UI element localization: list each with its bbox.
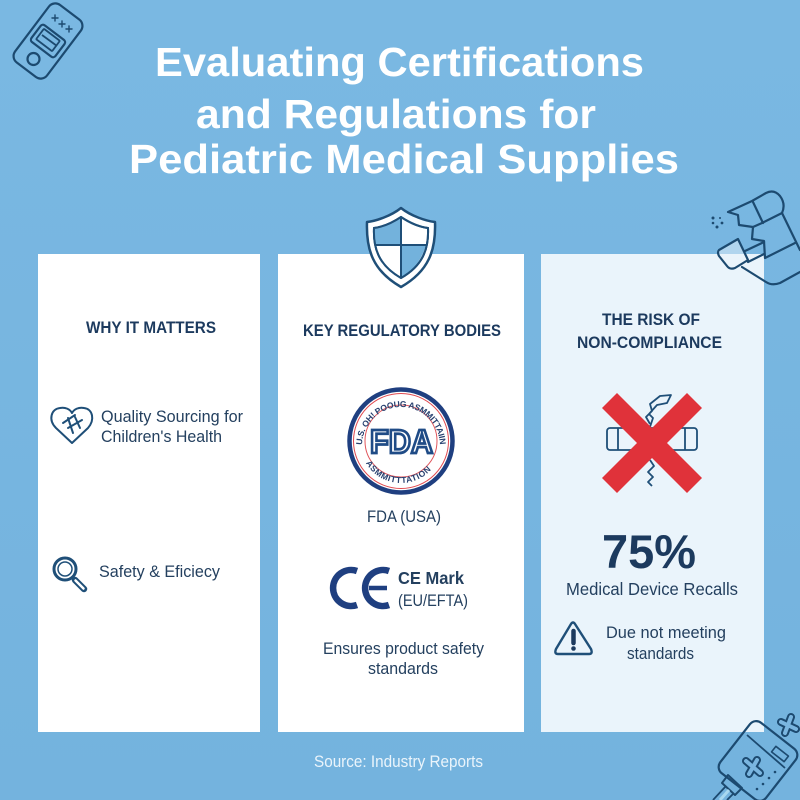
heading: why it matters: WHY IT MATTERS bbox=[86, 318, 216, 337]
stat: 75 percent: 75% bbox=[602, 525, 696, 578]
text: quality sourcing bbox=[101, 407, 243, 446]
text: ensures product safety: standards bbox=[368, 659, 438, 678]
source: Source: Industry Reports bbox=[314, 752, 483, 771]
text: quality sourcing: Children's Health bbox=[101, 427, 222, 446]
text: ensures product safety bbox=[323, 639, 484, 678]
panel: why it matters bbox=[38, 254, 260, 732]
text: medical device recalls: Medical Device Recalls bbox=[566, 579, 738, 599]
logo: FDA seal: U.S. OH! POOUG ASMMITTAIIN bbox=[356, 401, 446, 444]
text: due not meeting standards: Due not meeting bbox=[606, 623, 726, 642]
heading: key regulatory bodies: KEY REGULATORY BODIES bbox=[303, 321, 501, 340]
title: Pediatric Medical Supplies bbox=[129, 136, 679, 182]
text: due not meeting standards bbox=[606, 623, 726, 663]
icon: heart with bandage bbox=[51, 408, 92, 443]
icon: magnifying glass bbox=[54, 558, 84, 589]
title: and Regulations for bbox=[196, 91, 596, 137]
text: ensures product safety: Ensures product safety bbox=[323, 639, 484, 658]
logo: FDA seal bbox=[347, 387, 455, 495]
text: CE mark label: CE Mark bbox=[398, 568, 464, 588]
icon: medical device bottom right bbox=[713, 717, 800, 800]
text: FDA USA: FDA (USA) bbox=[367, 507, 441, 526]
icon: test device top left bbox=[10, 0, 86, 82]
heading: risk of non-compliance: THE RISK OF bbox=[602, 310, 700, 329]
logo: FDA seal: FDA bbox=[370, 423, 433, 460]
text: safety and efficiency: Safety & Eficiecy bbox=[99, 562, 220, 581]
panel: risk of non-compliance bbox=[541, 254, 764, 732]
heading: risk of non-compliance bbox=[577, 310, 722, 352]
heading: risk of non-compliance: NON-COMPLIANCE bbox=[577, 333, 722, 352]
panel: key regulatory bodies bbox=[278, 254, 524, 732]
title bbox=[129, 39, 679, 182]
logo: FDA seal: ASMMITTTATION bbox=[366, 462, 431, 483]
icon: bandage top right bbox=[718, 192, 800, 284]
icon: shield bbox=[367, 208, 435, 287]
text: due not meeting standards: standards bbox=[627, 644, 694, 663]
text: CE mark label bbox=[398, 568, 468, 610]
text: CE mark label: (EU/EFTA) bbox=[398, 591, 468, 610]
icon: broken device with red cross bbox=[602, 393, 702, 493]
text: quality sourcing: Quality Sourcing for bbox=[101, 407, 243, 426]
icon: warning triangle bbox=[555, 622, 592, 654]
logo: CE mark bbox=[333, 570, 389, 606]
title: Evaluating Certifications bbox=[155, 39, 644, 85]
icon: sparkle dots bbox=[712, 216, 723, 228]
